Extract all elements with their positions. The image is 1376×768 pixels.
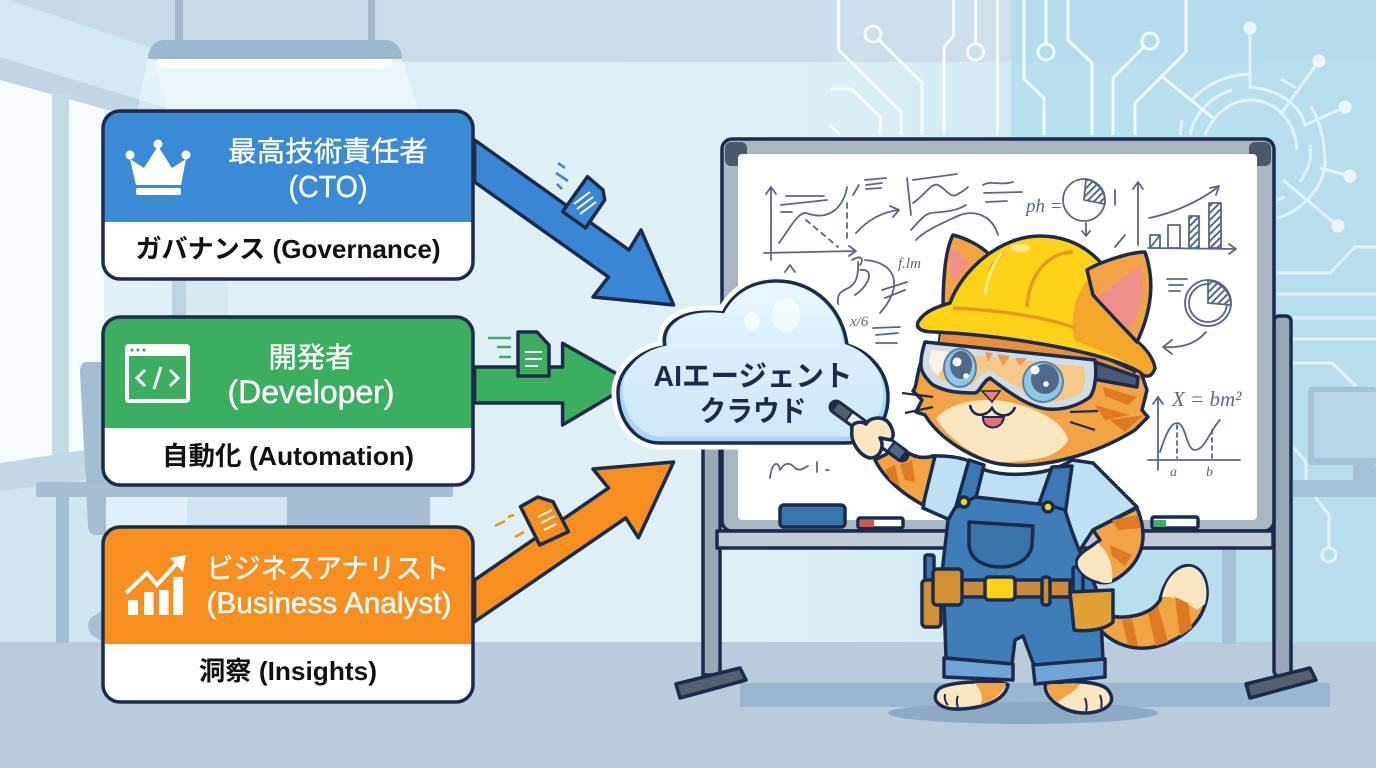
- heading: developer: [228, 342, 394, 410]
- cat feet: [935, 682, 1112, 713]
- whiteboard stand legs: [676, 316, 1316, 698]
- heading: CTO: (CTO): [288, 169, 368, 204]
- cat right arm: [1077, 508, 1143, 583]
- heading: developer: (Developer): [228, 374, 394, 410]
- heading: developer: 開発者: [268, 342, 354, 373]
- cloud label: AIエージェント: [654, 361, 852, 393]
- heading: business analyst: (Business Analyst): [206, 587, 452, 620]
- cloud label: クラウド: [700, 396, 806, 428]
- whiteboard sketches: X = bm²: [1171, 387, 1242, 411]
- icon: crown: [126, 140, 190, 195]
- panel: CTO: [103, 111, 473, 279]
- marker tray: [717, 505, 1273, 548]
- heading: CTO: [228, 136, 428, 204]
- icon: growth chart: [126, 555, 186, 615]
- cat shirt: [923, 456, 1137, 560]
- whiteboard sketches: f.lm: [898, 256, 921, 272]
- label: insights: 洞察 (Insights): [199, 656, 377, 686]
- whiteboard sketches: x/6: [849, 314, 869, 330]
- cat helmet: [917, 236, 1155, 380]
- panel: business analyst: [103, 527, 473, 702]
- icon: orange document: [495, 497, 568, 545]
- whiteboard sketches: b: [1206, 465, 1213, 480]
- ceiling lamp: [148, 0, 402, 69]
- icon: green document: [488, 332, 549, 376]
- cat right ear: [1087, 252, 1151, 342]
- cat tail: [1100, 566, 1207, 648]
- whiteboard sketches: [764, 174, 1242, 480]
- heading: business analyst: ビジネスアナリスト: [206, 553, 450, 584]
- icon: blue document: [556, 163, 605, 228]
- arrow: blue, CTO to cloud: [475, 140, 674, 305]
- whiteboard sketches: ph =: [1024, 196, 1063, 217]
- cat eyes: [943, 348, 1064, 403]
- heading: CTO: 最高技術責任者: [228, 136, 428, 167]
- cat goggles: [921, 342, 1138, 409]
- arrow: green, developer to cloud: [475, 332, 633, 425]
- cloud: AI agent cloud: [618, 281, 888, 443]
- cat left ear: [943, 235, 990, 310]
- label: governance: ガバナンス (Governance): [136, 234, 440, 264]
- icon: code window: [125, 344, 190, 403]
- arrow: orange, analyst to cloud: [475, 462, 674, 622]
- whiteboard: [717, 139, 1274, 548]
- character: cat engineer: [836, 235, 1207, 724]
- heading: business analyst: [206, 553, 452, 620]
- cat left arm and marker: [836, 407, 935, 505]
- whiteboard sketches: a: [1170, 465, 1177, 480]
- cat tool belt: [922, 555, 1113, 631]
- cat overalls: [941, 460, 1105, 684]
- panel: developer: [103, 317, 473, 485]
- background circuit lines: [830, 0, 1376, 562]
- cloud label: [654, 361, 852, 428]
- label: automation: 自動化 (Automation): [162, 441, 414, 471]
- cat head: [902, 320, 1148, 465]
